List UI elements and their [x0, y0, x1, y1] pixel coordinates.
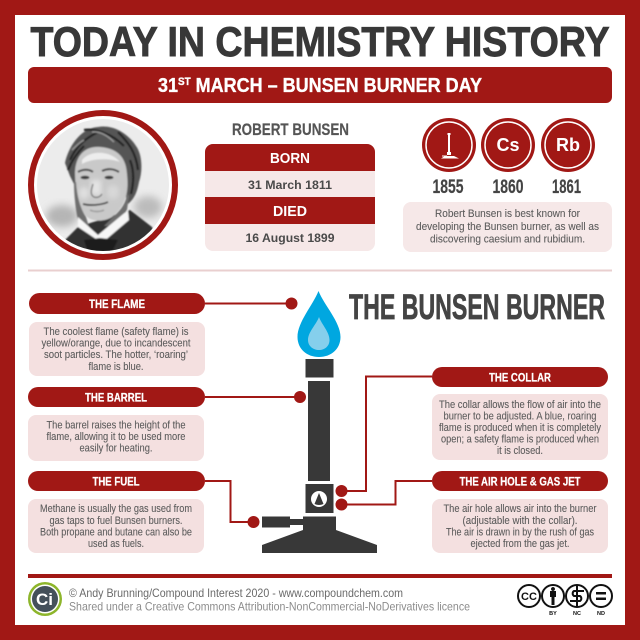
panel: the flame: flame is blue.: [88, 361, 144, 373]
icon: Bunsen burner 1855: [422, 118, 476, 172]
panel: the flame: yellow/orange, due to incandescent: [42, 338, 191, 350]
date banner: [28, 67, 612, 103]
summary text block: [403, 202, 612, 252]
panel: the barrel: flame, allowing it to be used more: [46, 431, 186, 443]
logo: Compound Interest: Ci: [36, 590, 53, 609]
brows and eyes: [78, 169, 119, 172]
panel: the flame: The coolest flame (safety flame) is: [44, 326, 189, 338]
icon: caesium: [481, 118, 535, 172]
panel: the air hole and gas jet: The air hole allows air into the burner: [444, 503, 597, 515]
summary text block: discovering caesium and rubidium.: [430, 234, 585, 246]
face: [75, 147, 128, 221]
panel: the collar: burner to be adjusted. A blue, roaring: [444, 410, 596, 422]
year 1861: 1861: [552, 177, 581, 198]
licence icons: CC: [521, 591, 537, 603]
panel: the barrel: [28, 387, 205, 461]
panel: the collar: open; a safety flame is produced when: [441, 434, 599, 446]
panel: the barrel: THE BARREL: [85, 392, 147, 404]
panel: the fuel: gas taps to fuel Bunsen burners.: [50, 515, 183, 527]
panel: the fuel: [28, 471, 205, 553]
leader line: fuel: [205, 481, 260, 528]
panel: the collar: The collar allows the flow of air into the: [439, 399, 601, 411]
panel: the air hole and gas jet: The air is drawn in by the rush of gas: [446, 526, 594, 538]
born and died table: 16 August 1899: [246, 231, 335, 245]
icon: caesium: Cs: [496, 135, 520, 155]
licence icons: [518, 585, 612, 617]
panel: the barrel: easily for heating.: [80, 442, 153, 454]
panel: the air hole and gas jet: ejected from the gas jet.: [470, 538, 570, 550]
footer credit: Shared under a Creative Commons Attribution-NonCommercial-NoDerivatives licence: [69, 600, 470, 614]
panel: the flame: [29, 293, 205, 376]
date banner: MARCH – BUNSEN BURNER DAY: [191, 75, 483, 97]
summary text block: developing the Bunsen burner, as well as: [416, 221, 600, 233]
coat: [65, 209, 154, 250]
licence icons: BY: [549, 611, 557, 617]
panel: the flame: soot particles. The hotter, ‘roaring’: [44, 349, 188, 361]
born and died table: 31 March 1811: [248, 178, 332, 192]
cravat: [84, 238, 118, 252]
leader line: barrel: [205, 391, 306, 403]
panel: the fuel: Both propane and butane can also be: [40, 526, 192, 538]
icon: air hole: [311, 491, 327, 507]
icon: rubidium: [541, 118, 595, 172]
panel: the barrel: The barrel raises the height of the: [46, 420, 186, 432]
footer credit: © Andy Brunning/Compound Interest 2020 - www.compoundchem.com: [69, 586, 403, 600]
panel: the collar: THE COLLAR: [489, 372, 552, 384]
logo: Compound Interest: [28, 582, 62, 616]
year 1860: 1860: [492, 177, 524, 198]
panel: the air hole and gas jet: THE AIR HOLE & GAS JET: [460, 476, 580, 488]
born and died table: DIED: [273, 204, 307, 220]
panel: the flame: THE FLAME: [89, 299, 145, 311]
whiskers: [74, 182, 90, 230]
date banner: ST: [178, 76, 191, 88]
year 1855: 1855: [432, 177, 464, 198]
leader line: flame: [205, 298, 298, 310]
panel: the collar: it is closed.: [497, 445, 543, 457]
icon: blue flame: [298, 291, 340, 357]
panel: the air hole and gas jet: [432, 471, 608, 553]
panel: the fuel: used as fuels.: [88, 538, 144, 550]
icon: rubidium: Rb: [556, 135, 580, 155]
licence icons: ND: [597, 611, 605, 617]
panel: the air hole and gas jet: (adjustable with the collar).: [462, 515, 578, 527]
burner body: [262, 359, 377, 553]
date banner: 31: [158, 75, 180, 97]
panel: the fuel: THE FUEL: [92, 476, 140, 488]
born and died table: [205, 144, 375, 251]
portrait of Robert Bunsen: [30, 110, 180, 260]
hair: [65, 127, 141, 204]
name heading: ROBERT BUNSEN: [232, 120, 349, 139]
panel: the collar: [432, 367, 608, 460]
born and died table: BORN: [270, 151, 310, 167]
footer credit: [69, 586, 470, 614]
leader line: air hole: [336, 481, 432, 510]
diagram: Bunsen burner: [262, 291, 377, 553]
summary text block: Robert Bunsen is best known for: [435, 208, 580, 220]
collar: [78, 210, 129, 243]
licence icons: NC: [573, 611, 581, 617]
panel: the fuel: Methane is usually the gas used from: [40, 503, 192, 515]
panel: the collar: flame is produced when it is completely: [439, 422, 602, 434]
nose and mouth: [91, 184, 102, 197]
leader line: collar: [336, 376, 432, 497]
